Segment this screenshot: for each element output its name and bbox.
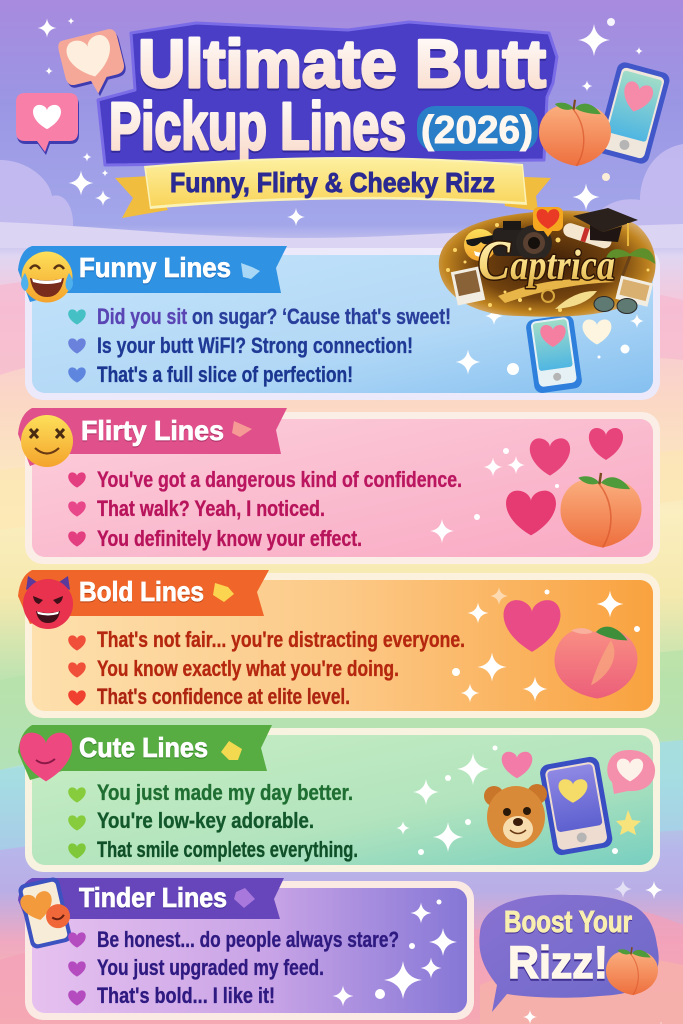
- panel: funny lines: [18, 246, 660, 400]
- lines: You're low-key adorable.: [97, 808, 314, 833]
- lines: [68, 780, 358, 862]
- lines: That smile completes everything.: [97, 837, 358, 862]
- title: Pickup Lines: [109, 89, 406, 164]
- ribbon: [18, 725, 272, 780]
- sparkles: header: [38, 18, 643, 226]
- panel: bold lines: [18, 570, 660, 718]
- ribbon: Flirty Lines: [81, 415, 224, 446]
- lines: Is your butt WiFI? Strong connection!: [97, 333, 413, 358]
- banner: subtitle: Funny, Flirty & Cheeky Rizz: [170, 167, 495, 198]
- ribbon: [18, 570, 269, 624]
- icon: laughing emoji: [21, 252, 73, 302]
- lines: [68, 927, 399, 1008]
- panel: tinder lines: [16, 875, 474, 1020]
- icon: bear: [484, 784, 547, 848]
- icon: header peach: [539, 100, 611, 166]
- ribbon: [18, 878, 284, 930]
- lines: That walk? Yeah, I noticed.: [97, 496, 325, 521]
- icon: smiling heart: [20, 733, 72, 781]
- lines: Be honest... do people always stare?: [97, 927, 399, 952]
- icon: pink speech bubble: [16, 93, 79, 155]
- panel: cute lines: [18, 725, 660, 872]
- lines: You've got a dangerous kind of confidence.: [97, 467, 462, 492]
- clouds: [0, 144, 683, 248]
- panel: flirty lines: [18, 408, 660, 564]
- sunglasses: [594, 296, 637, 314]
- icon: devil emoji: [23, 576, 73, 629]
- lines: You just made my day better.: [97, 780, 353, 805]
- palm: [606, 249, 654, 282]
- sunglasses emoji: [464, 229, 496, 261]
- ribbon: Cute Lines: [79, 732, 208, 763]
- lines: You just upgraded my feed.: [97, 955, 324, 980]
- lines: That's a full slice of perfection!: [97, 362, 353, 387]
- decorations: bear, phone, hearts, sparkles: [396, 746, 655, 856]
- scroll: [561, 221, 613, 250]
- callout: boost your rizz: Boost Your: [504, 904, 632, 939]
- lines: [68, 627, 465, 709]
- ribbon: [18, 246, 287, 302]
- lines: [68, 304, 451, 387]
- lines: That's bold... I like it!: [97, 983, 275, 1008]
- wordmark: Captrica: [478, 230, 615, 292]
- callout: boost your rizz: [479, 880, 663, 1024]
- lines: [68, 467, 462, 551]
- title: (2026): [421, 109, 533, 152]
- camera: [493, 221, 552, 261]
- callout: boost your rizz: Rizz!: [508, 937, 608, 988]
- lines: You definitely know your effect.: [97, 526, 362, 551]
- decorations: phone, hearts, sparkles: [456, 307, 644, 394]
- lines: That's confidence at elite level.: [97, 684, 350, 709]
- banner: subtitle: [115, 157, 551, 218]
- swoosh and feather: [498, 279, 615, 303]
- lines: You know exactly what you're doing.: [97, 656, 399, 681]
- ribbon: [18, 408, 287, 466]
- speech bubble heart: [533, 207, 563, 237]
- lines: That's not fair... you're distracting everyone.: [97, 627, 465, 652]
- decorations: heart, peach, sparkles: [452, 587, 640, 702]
- ribbon: Bold Lines: [79, 576, 204, 607]
- ribbon: Tinder Lines: [79, 882, 227, 913]
- icon: header phone: [595, 61, 671, 165]
- decorations: hearts, peach, sparkles: [430, 428, 642, 548]
- title: Ultimate Butt: [138, 26, 546, 102]
- ribbon: Funny Lines: [79, 252, 231, 283]
- graduation cap: [573, 208, 638, 246]
- lines: Did you sit on sugar? ‘Cause that's sweet!: [97, 304, 451, 329]
- icon: tinder phone: [16, 875, 76, 950]
- decorations: sparkles: [332, 900, 457, 1006]
- logo: Captrica: [439, 207, 656, 317]
- title: [98, 22, 557, 165]
- photos: [451, 266, 485, 306]
- icon: peach speech bubble: [57, 27, 131, 103]
- icon: star-eyed emoji: [21, 415, 73, 467]
